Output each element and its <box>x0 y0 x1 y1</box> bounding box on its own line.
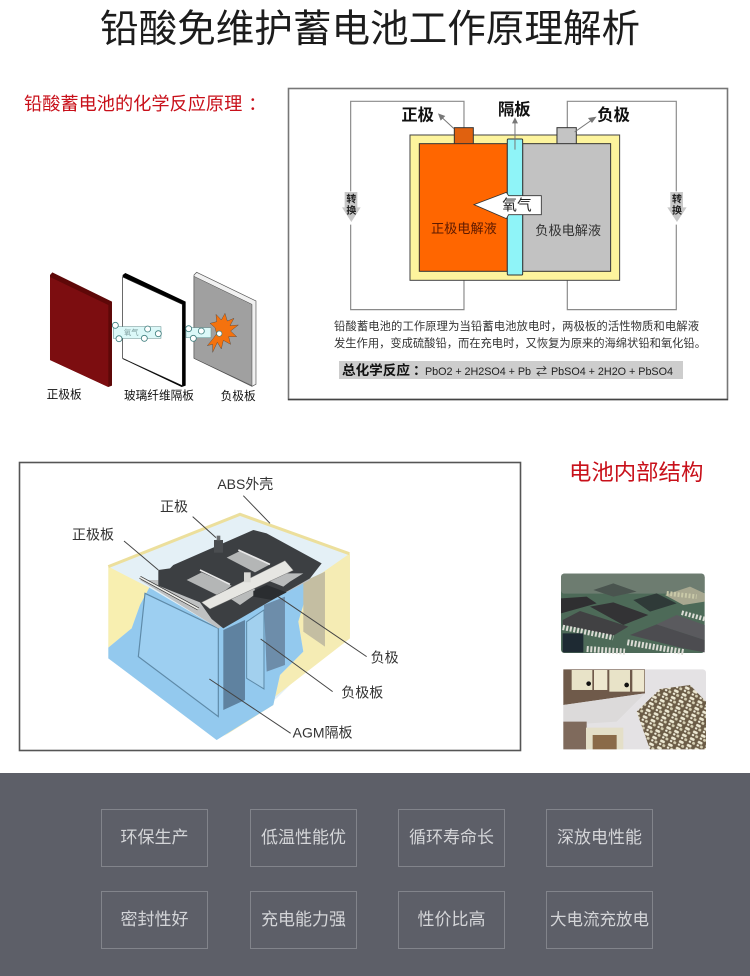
feature: 环保生产: 环保生产 <box>120 828 188 847</box>
heading: internal structure: 电池内部结构 <box>569 460 703 485</box>
icon: case interior <box>108 513 350 740</box>
formula bar: PbO2 + 2H2SO4 + Pb <box>425 366 531 378</box>
arrow: convert left: 转 <box>346 193 356 206</box>
formula bar: PbSO4 + 2H2O + PbSO4 <box>551 366 673 378</box>
arrow: convert right: 转 <box>672 193 682 206</box>
formula bar: ⇄ <box>536 365 547 378</box>
label: positive: 正极 <box>401 107 434 125</box>
label: negative: 负极 <box>597 106 630 125</box>
feature: 深放电性能 <box>546 809 653 867</box>
diagram: battery cutaway <box>72 476 399 741</box>
wires <box>351 101 676 310</box>
icon: grey plate tops <box>140 572 310 628</box>
heading: chemical reaction principle: 铅酸蓄电池的化学反应原理 ： <box>24 94 266 114</box>
icon: positive plate <box>50 272 112 387</box>
feature: 深放电性能: 深放电性能 <box>557 828 642 847</box>
panel: features <box>101 809 653 949</box>
feature: 密封性好: 密封性好 <box>120 910 188 929</box>
label: separator: 隔板 <box>498 101 531 119</box>
feature: 大电流充放电: 大电流充放电 <box>550 911 649 929</box>
arrow: oxygen through separator <box>112 322 211 342</box>
feature: 大电流充放电 <box>546 891 653 949</box>
feature: 低温性能优 <box>250 809 357 867</box>
icon: positive terminal <box>454 128 473 144</box>
formula bar: 总化学反应： <box>342 362 427 378</box>
arrow: convert right: 换 <box>672 204 682 217</box>
feature: 循环寿命长 <box>398 809 505 867</box>
feature: 环保生产 <box>101 809 208 867</box>
photo: circuit boards <box>561 574 705 653</box>
photo: plastic pellets <box>563 669 706 749</box>
text: principle description <box>334 319 706 350</box>
label: negative plate: 负极板 <box>221 389 256 403</box>
icon: yellow shell left <box>108 567 149 648</box>
icon: separator <box>507 139 523 275</box>
feature: 循环寿命长: 循环寿命长 <box>409 828 494 847</box>
icon: positive electrolyte <box>419 144 507 271</box>
feature: 充电能力强 <box>250 891 357 949</box>
icon: blue electrolyte <box>108 577 317 740</box>
label: negative plate: 负极板 <box>341 685 383 701</box>
arrow: oxygen: 氧气 <box>502 197 532 214</box>
text: principle description: 铅酸蓄电池的工作原理为当铅蓄电池放电时，两极板的活性物质和电解液 <box>334 319 699 333</box>
icon: reaction burst <box>207 313 238 352</box>
icon: cell casing <box>410 135 620 280</box>
title: 铅酸免维护蓄电池工作原理解析 <box>100 8 640 51</box>
icon: negative terminal <box>557 128 576 144</box>
label leaders <box>124 496 367 733</box>
label: AGM separator: AGM隔板 <box>293 725 352 741</box>
label: negative: 负极 <box>371 650 399 666</box>
icon: negative plate <box>194 272 256 386</box>
feature: 充电能力强: 充电能力强 <box>261 910 346 929</box>
panel: working principle <box>288 88 728 400</box>
arrow: convert left <box>342 192 361 222</box>
feature: 密封性好 <box>101 891 208 949</box>
feature: 低温性能优: 低温性能优 <box>261 828 346 847</box>
arrow: convert right <box>667 192 687 222</box>
arrow: convert left: 换 <box>346 204 356 217</box>
diagram: battery cell <box>342 101 687 310</box>
label: negative electrolyte: 负极电解液 <box>535 223 601 238</box>
icon: negative electrolyte <box>523 144 611 271</box>
icon: terminal posts <box>214 536 251 582</box>
icon: yellow shell right <box>223 553 350 737</box>
label: positive plate: 正极板 <box>72 527 114 543</box>
pointer arrows <box>440 115 595 150</box>
label: glass fibre separator: 玻璃纤维隔板 <box>124 388 194 402</box>
icon: front AGM plate <box>138 593 218 717</box>
diagram: plates with oxygen flow <box>47 272 256 403</box>
feature: 性价比高: 性价比高 <box>418 910 486 929</box>
label: positive plate: 正极板 <box>47 387 82 401</box>
arrow: oxygen <box>474 192 541 219</box>
formula bar <box>339 361 683 379</box>
label: positive electrolyte: 正极电解液 <box>431 221 497 236</box>
icon: dark top straps <box>140 530 322 628</box>
label: positive: 正极 <box>160 499 188 515</box>
label: ABS shell: ABS外壳 <box>217 476 273 492</box>
icon: plates behind <box>223 620 245 710</box>
panel: feature band background <box>0 773 750 976</box>
text: principle description: 发生作用，变成硫酸铅，而在充电时，又恢复为原来的海绵状铅和氧化铅。 <box>334 336 706 350</box>
arrow: oxygen through separator: 氧气 <box>124 328 139 337</box>
icon: shell rim <box>108 514 349 567</box>
icon: glass fibre separator <box>123 273 186 387</box>
panel: internal structure <box>20 462 520 750</box>
feature: 性价比高 <box>398 891 505 949</box>
